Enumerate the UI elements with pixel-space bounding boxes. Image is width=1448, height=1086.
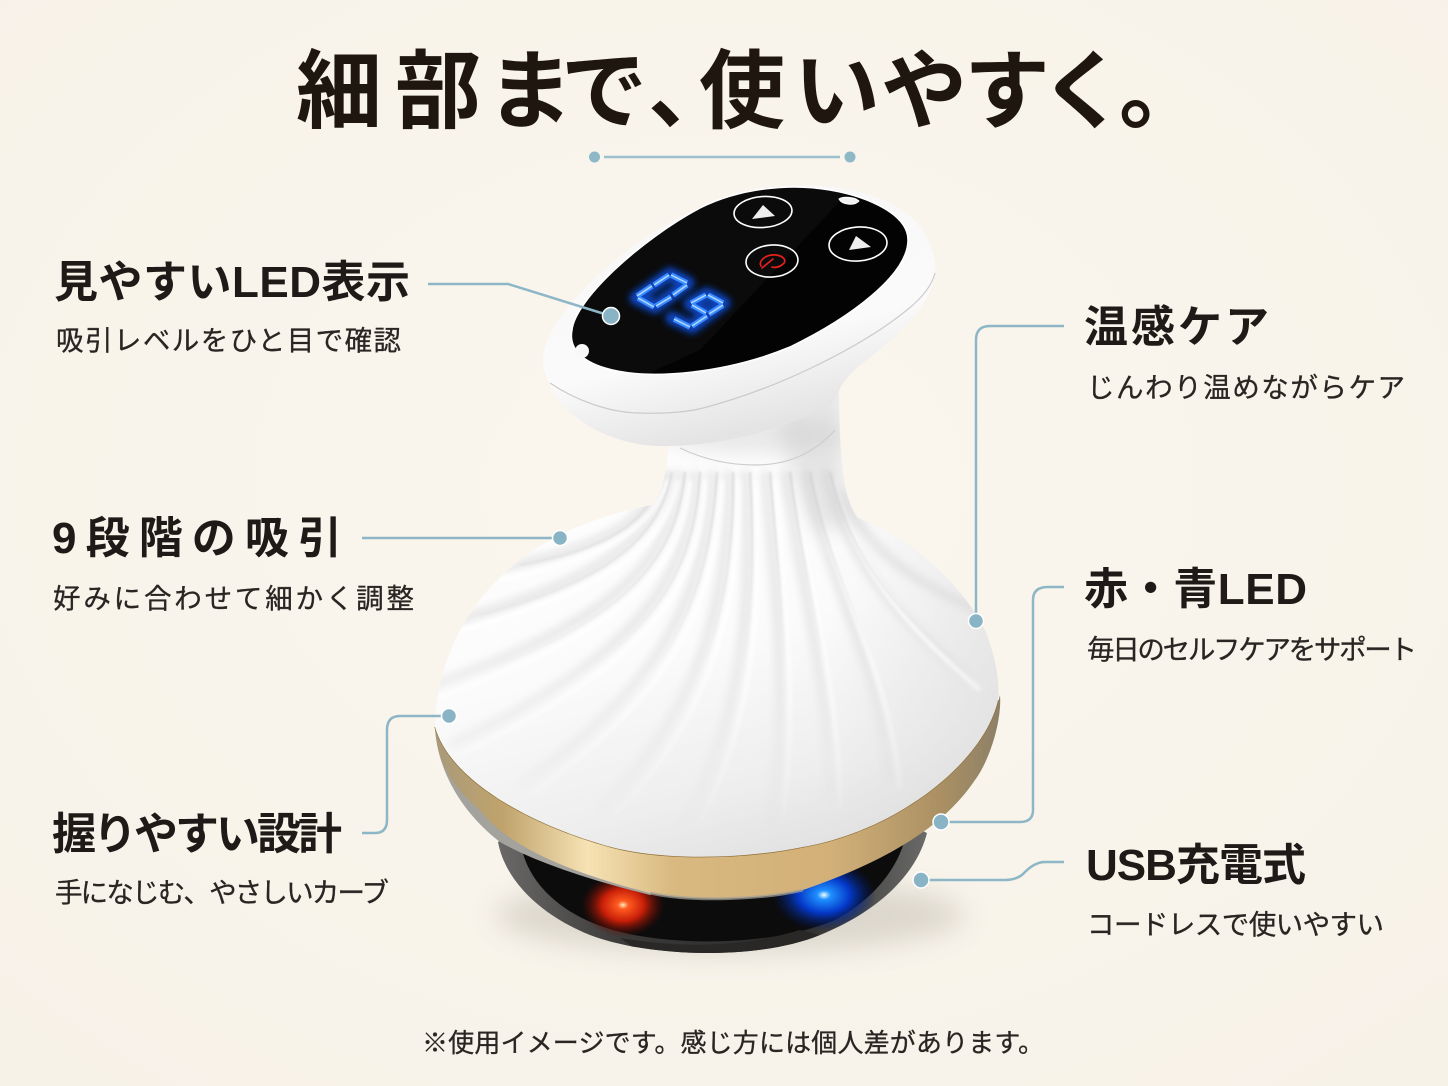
LED digits 0 9 [636,274,724,327]
footnote: ※使用イメージです。感じ方には個人差があります。 [422,1028,1044,1058]
callout: USB充電式: USB充電式 [1086,841,1306,890]
product: massager device [420,180,1000,955]
title divider with end dots [589,152,856,162]
notch [575,344,589,358]
callout: 赤・青LED: 毎日のセルフケアをサポート [1087,634,1417,665]
lower translucent light base [498,820,927,955]
callout: 握りやすい設計: 手になじむ、やさしいカーブ [55,877,389,908]
callout: 赤・青LED: 赤・青LED [1084,565,1307,614]
button: right arrow [828,225,888,263]
button: power [745,243,799,279]
callout: 温感ケア [968,303,1405,628]
head [543,185,935,446]
title: 細部まで、使いやすく。 [296,44,1205,140]
callout: 握りやすい設計: 握りやすい設計 [52,810,342,859]
callout: 見やすいLED表示: 吸引レベルをひと目で確認 [56,325,401,356]
callout: 9段階の吸引: 9段階の吸引 [52,514,342,563]
callout: 見やすいLED表示: 見やすいLED表示 [54,258,410,307]
callout: 温感ケア: 温感ケア [1084,303,1269,352]
gold ring [435,695,1000,899]
callout: USB充電式: コードレスで使いやすい [1087,909,1384,940]
callout: 握りやすい設計 [52,708,456,908]
callout: 見やすいLED表示 [54,258,620,356]
callout: USB充電式 [913,841,1384,940]
control panel [572,188,908,374]
button: upper arrow [733,195,793,229]
callout: 赤・青LED [933,565,1417,830]
ground shadow [495,877,965,953]
callout: 9段階の吸引: 好みに合わせて細かく調整 [53,583,414,614]
fluted white body [420,380,1000,857]
callout: 温感ケア: じんわり温めながらケア [1087,372,1405,403]
callout: 9段階の吸引 [52,514,568,614]
indicator [839,197,859,204]
